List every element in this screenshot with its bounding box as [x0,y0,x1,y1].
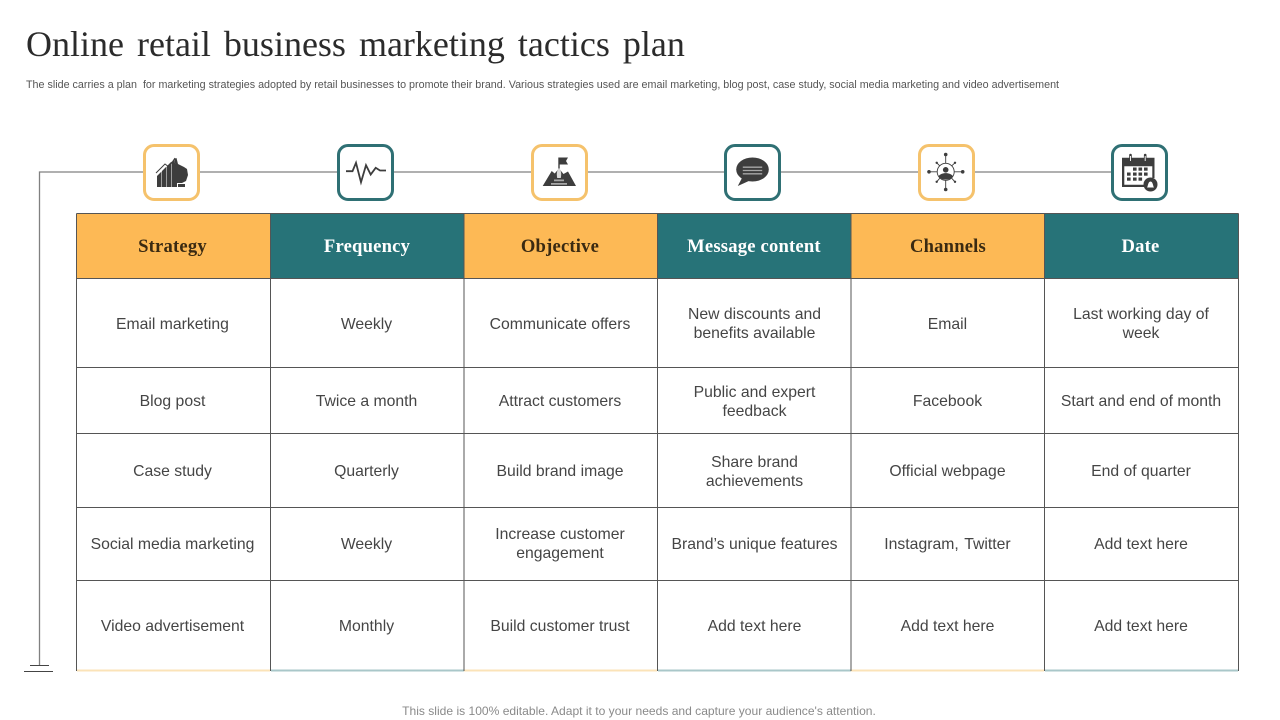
row: Social media marketing: Brand’s unique features [671,536,838,552]
header backgrounds [77,214,1238,278]
row: Social media marketing: Weekly [341,536,392,552]
header: Frequency: Frequency [324,236,410,256]
icon: network person [918,144,974,201]
row: Email marketing: New discounts and benefits available [688,306,821,342]
row: Blog post: Start and end of month [1061,393,1221,410]
row: Blog post: Twice a month [316,393,417,410]
header: Strategy: Strategy [138,236,207,256]
icon: calendar with bell [1111,144,1168,201]
footer note: This slide is 100% editable. Adapt it to your needs and capture your audience's attention. [402,704,876,718]
row: Case study: Build brand image [497,463,623,480]
row: Blog post [140,384,1221,420]
row: Blog post: Public and expert feedback [694,384,815,420]
header: Objective: Objective [521,236,599,256]
header: Date: Date [1122,236,1159,256]
icon: speech bubble [724,144,781,201]
row: Video advertisement: Monthly [339,618,394,634]
row: Case study: Quarterly [334,463,399,480]
row: Email marketing: Weekly [341,316,392,332]
header: Channels: Channels [910,236,986,256]
icon: pulse line [337,144,394,201]
row: Blog post: Attract customers [499,393,621,410]
row: Video advertisement: Add text here [708,618,801,634]
row: Social media marketing: Increase customer engagement [495,526,625,562]
row: Video advertisement: Video advertisement [101,618,244,634]
row: Blog post: Facebook [913,393,982,410]
title: Online retail business marketing tactics plan [26,24,685,64]
row: Case study: End of quarter [1091,463,1191,480]
row: Email marketing: Last working day of week [1073,306,1209,342]
row: Email marketing: Email marketing [116,316,229,332]
row: Email marketing: Email [928,316,967,332]
row: Social media marketing: Add text here [1094,536,1188,552]
row: Blog post: Blog post [140,393,205,410]
row: Social media marketing: Social media marketing [91,536,254,552]
icon: strategy chart and hand [143,144,200,201]
row: Case study: Official webpage [889,463,1006,480]
icon: mountain with flag [530,144,588,201]
row: Video advertisement [101,618,1188,634]
row: Case study: Share brand achievements [706,454,803,490]
row: Social media marketing: Instagram, Twitter [884,536,1011,552]
row: Email marketing [116,306,1209,342]
row: Social media marketing [91,526,1188,562]
subtitle: The slide carries a plan for marketing strategies adopted by retail businesses to promote their brand. Various strategies used are email marketing, blog post, case study, social media marketing and video advertisement [26,79,1059,91]
row: Video advertisement: Add text here [901,618,994,634]
row: Video advertisement: Add text here [1094,618,1188,634]
row: Email marketing: Communicate offers [490,316,630,332]
header: Message content: Message content [687,236,821,256]
row: Video advertisement: Build customer trust [490,618,630,634]
row: Case study [133,454,1191,490]
row: Case study: Case study [133,463,212,480]
